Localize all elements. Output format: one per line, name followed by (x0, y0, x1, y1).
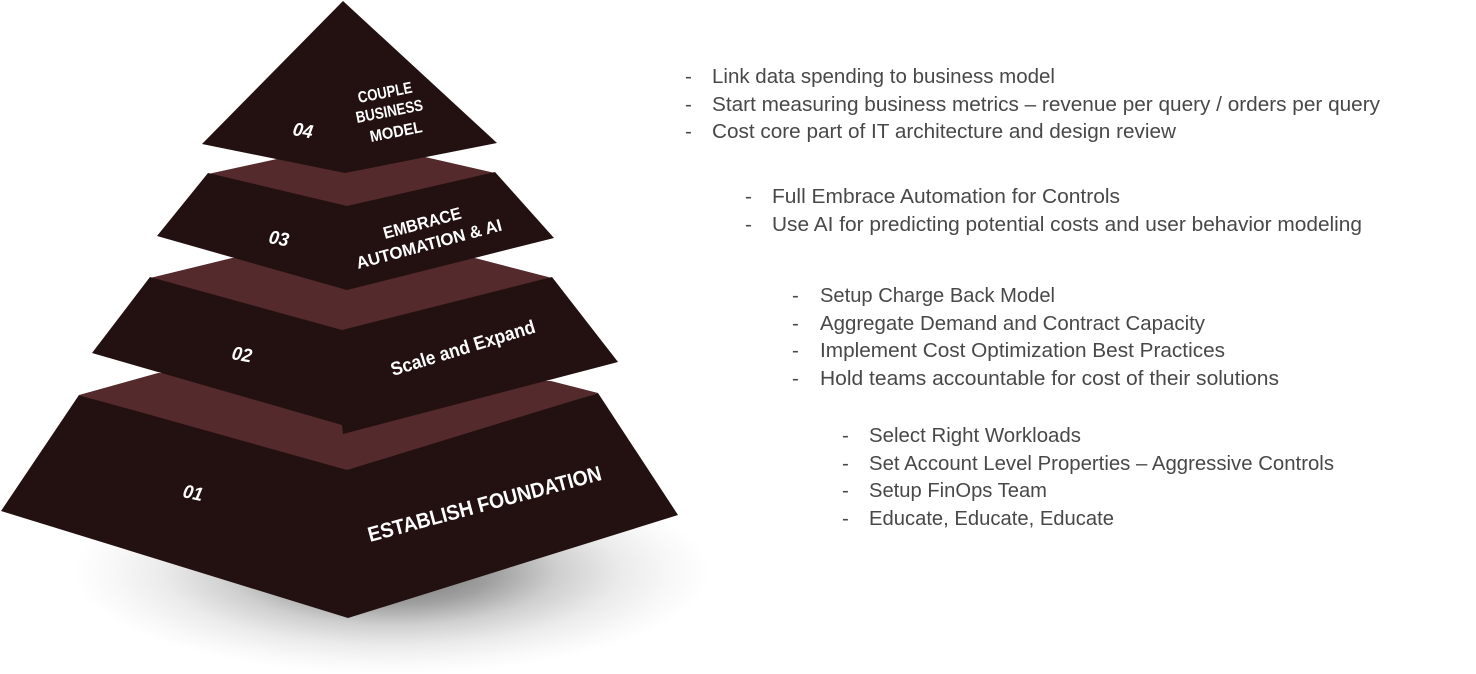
label: embrace: EMBRACE (381, 204, 463, 243)
text block: tier 02 actions (792, 284, 1279, 390)
pyramid tier 04: couple business model (202, 1, 497, 173)
text block: tier 04 actions: Link data spending to business model (712, 65, 1055, 88)
text block: tier 03 actions: - (745, 185, 752, 208)
pyramid drop shadow (74, 470, 710, 674)
text block: tier 01 actions: Select Right Workloads (869, 424, 1081, 447)
text block: tier 02 actions: - (792, 367, 799, 390)
text block: tier 01 actions (842, 424, 1334, 530)
text block: tier 01 actions: - (842, 479, 849, 502)
text block: tier 03 actions: - (745, 213, 752, 236)
text block: tier 04 actions: Cost core part of IT architecture and design review (712, 120, 1176, 143)
number 04: 04 (291, 119, 315, 143)
label: scale and expand: Scale and Expand (388, 317, 538, 381)
text block: tier 02 actions: Hold teams accountable for cost of their solutions (820, 367, 1279, 390)
text block: tier 02 actions: - (792, 339, 799, 362)
label: establish foundation: ESTABLISH FOUNDATION (365, 462, 604, 547)
label: couple: COUPLE (357, 80, 414, 107)
text block: tier 02 actions: Setup Charge Back Model (820, 284, 1055, 307)
text block: tier 02 actions: Aggregate Demand and Contract Capacity (820, 312, 1206, 335)
text block: tier 02 actions: - (792, 312, 799, 335)
text block: tier 01 actions: - (842, 424, 849, 447)
text block: tier 04 actions (685, 65, 1381, 143)
text block: tier 03 actions (745, 185, 1362, 236)
text block: tier 01 actions: Set Account Level Properties – Aggressive Controls (869, 452, 1334, 475)
text block: tier 01 actions: - (842, 507, 849, 530)
number 02: 02 (230, 343, 254, 367)
label: model: MODEL (369, 119, 424, 146)
text block: tier 04 actions: - (685, 93, 692, 116)
text block: tier 04 actions: Start measuring business metrics – revenue per query / orders per query (712, 93, 1381, 116)
text block: tier 01 actions: Setup FinOps Team (869, 479, 1047, 502)
text block: tier 01 actions: Educate, Educate, Educate (869, 507, 1114, 530)
pyramid tier 01: establish foundation (1, 373, 678, 618)
pyramid tier 03: embrace automation and AI (157, 157, 554, 290)
pyramid tier 02: scale and expand (92, 258, 618, 434)
label: automation and AI: AUTOMATION & AI (354, 216, 504, 273)
text block: tier 04 actions: - (685, 120, 692, 143)
text block: tier 03 actions: Use AI for predicting potential costs and user behavior modeling (772, 213, 1362, 236)
label: business: BUSINESS (355, 97, 425, 127)
text block: tier 02 actions: - (792, 284, 799, 307)
number 03: 03 (267, 227, 291, 251)
text block: tier 01 actions: - (842, 452, 849, 475)
text block: tier 02 actions: Implement Cost Optimization Best Practices (820, 339, 1225, 362)
number 01: 01 (181, 481, 205, 506)
text block: tier 04 actions: - (685, 65, 692, 88)
text block: tier 03 actions: Full Embrace Automation for Controls (772, 185, 1120, 208)
